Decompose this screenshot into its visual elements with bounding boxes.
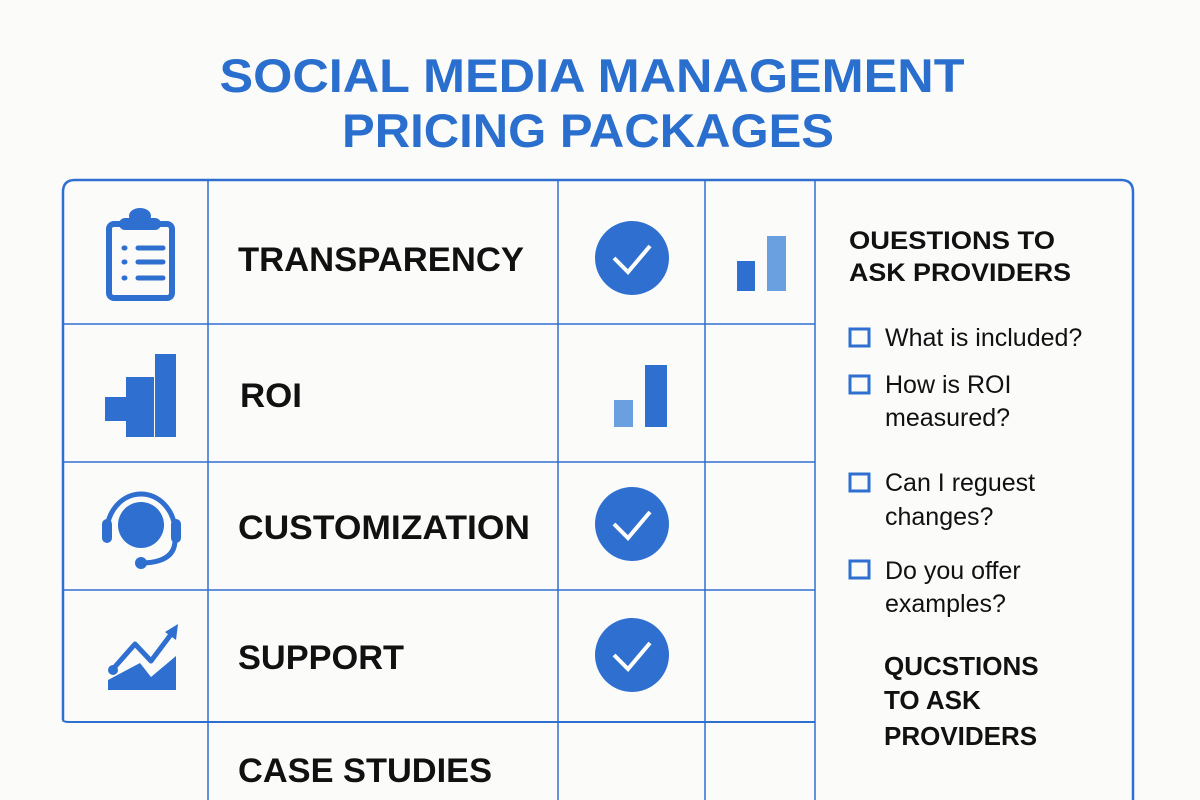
panel: questions: QUCSTIONS (884, 651, 1039, 681)
panel: questions (849, 227, 1082, 751)
row labels: SUPPORT (238, 639, 404, 677)
panel: questions: TO ASK (884, 685, 981, 715)
panel: questions: How is ROI (885, 371, 1011, 399)
icon: roi blocks (105, 354, 176, 437)
table grid (63, 180, 1133, 800)
panel: questions: changes? (885, 503, 993, 531)
panel: questions: measured? (885, 404, 1010, 432)
row labels: ROI (240, 377, 302, 415)
panel: questions: ASK PROVIDERS (849, 259, 1071, 287)
panel: questions: What is included? (885, 324, 1082, 352)
row labels: CUSTOMIZATION (238, 509, 530, 547)
icon: clipboard (109, 211, 172, 298)
title (220, 49, 965, 157)
panel: questions: examples? (885, 590, 1006, 618)
row labels (238, 241, 530, 790)
icon: growth chart (108, 624, 178, 690)
row labels: TRANSPARENCY (238, 241, 524, 279)
title: PRICING PACKAGES (342, 104, 834, 157)
bar icons (614, 236, 786, 427)
panel: questions: Do you offer (885, 557, 1021, 585)
icon: headset (102, 494, 181, 569)
title: SOCIAL MEDIA MANAGEMENT (220, 49, 965, 102)
panel: questions: Can I reguest (885, 469, 1035, 497)
panel: questions: PROVIDERS (884, 721, 1037, 751)
check icons (595, 221, 669, 692)
panel: questions: OUESTIONS TO (849, 227, 1055, 255)
row labels: CASE STUDIES (238, 752, 492, 790)
